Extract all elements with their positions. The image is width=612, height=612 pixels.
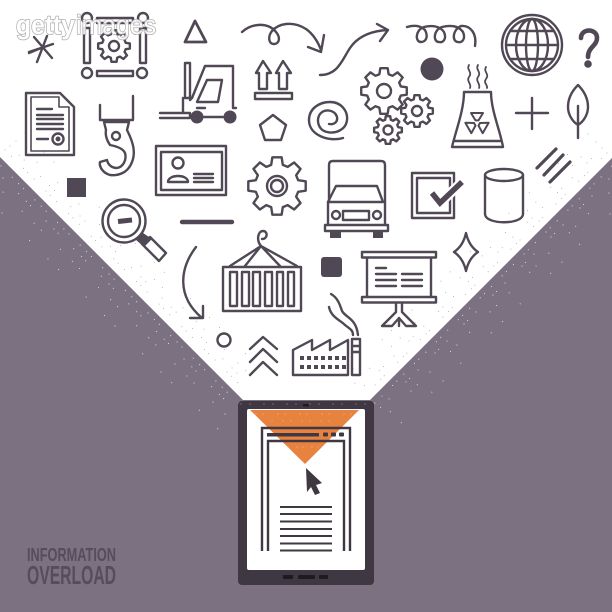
watermark: gettyimages: images [76, 10, 156, 40]
icon: coil [407, 26, 475, 46]
icon: cylinder [485, 169, 523, 222]
icon: truck [325, 161, 388, 238]
icon: frame with gear [82, 13, 148, 78]
icon: up arrows [255, 61, 292, 99]
title: information overload: OVERLOAD [27, 560, 116, 590]
icon: document [26, 93, 74, 155]
icon: checkbox [412, 173, 462, 218]
orange light triangle [250, 410, 359, 464]
icon: small square [67, 178, 86, 197]
icon: triple chevrons [250, 337, 277, 375]
icon: factory with smoke [293, 294, 360, 375]
icon: cargo container [223, 231, 301, 311]
icon: magnifier [102, 200, 166, 261]
icon: pentagon [260, 115, 286, 140]
icon: big gear [248, 157, 306, 215]
icon: three gears [361, 68, 433, 144]
browser window outline [262, 428, 350, 551]
tablet buttons [283, 404, 328, 579]
tablet body [238, 401, 374, 585]
icon: dash [182, 220, 232, 224]
icon: globe [502, 15, 562, 75]
arrow: curved down arrow [183, 247, 203, 318]
page text lines [280, 507, 332, 550]
icon: spiral [309, 102, 347, 139]
icon: sparkle diamond [454, 233, 478, 271]
icon: small circle [218, 334, 230, 346]
icon: presentation board [362, 252, 436, 326]
tablet [238, 401, 374, 585]
icon: plus [516, 98, 548, 129]
icon: asterisk [29, 36, 53, 62]
title: information overload [27, 545, 116, 590]
icon: crane hook [100, 96, 134, 175]
icon: solid dot [420, 58, 444, 80]
icon: forklift [160, 63, 236, 124]
title: information overload: INFORMATION [27, 545, 116, 565]
icon: nuclear cooling tower [452, 65, 503, 147]
icon: leaf [568, 85, 588, 138]
arrow: looping arrow [242, 24, 324, 52]
address bar [267, 432, 344, 436]
icon: rounded square [321, 257, 342, 277]
watermark: gettyimages [16, 10, 156, 40]
tablet screen [247, 409, 365, 570]
watermark: gettyimages: getty [16, 10, 75, 40]
icon: question mark [581, 30, 597, 68]
cursor arrow [306, 468, 322, 495]
icon: three diagonal lines [537, 149, 570, 182]
purple background with white light wedge [0, 157, 612, 612]
arrow: squiggle arrow [320, 24, 388, 75]
icon: ID card [156, 146, 226, 195]
icon: triangle [185, 21, 206, 42]
